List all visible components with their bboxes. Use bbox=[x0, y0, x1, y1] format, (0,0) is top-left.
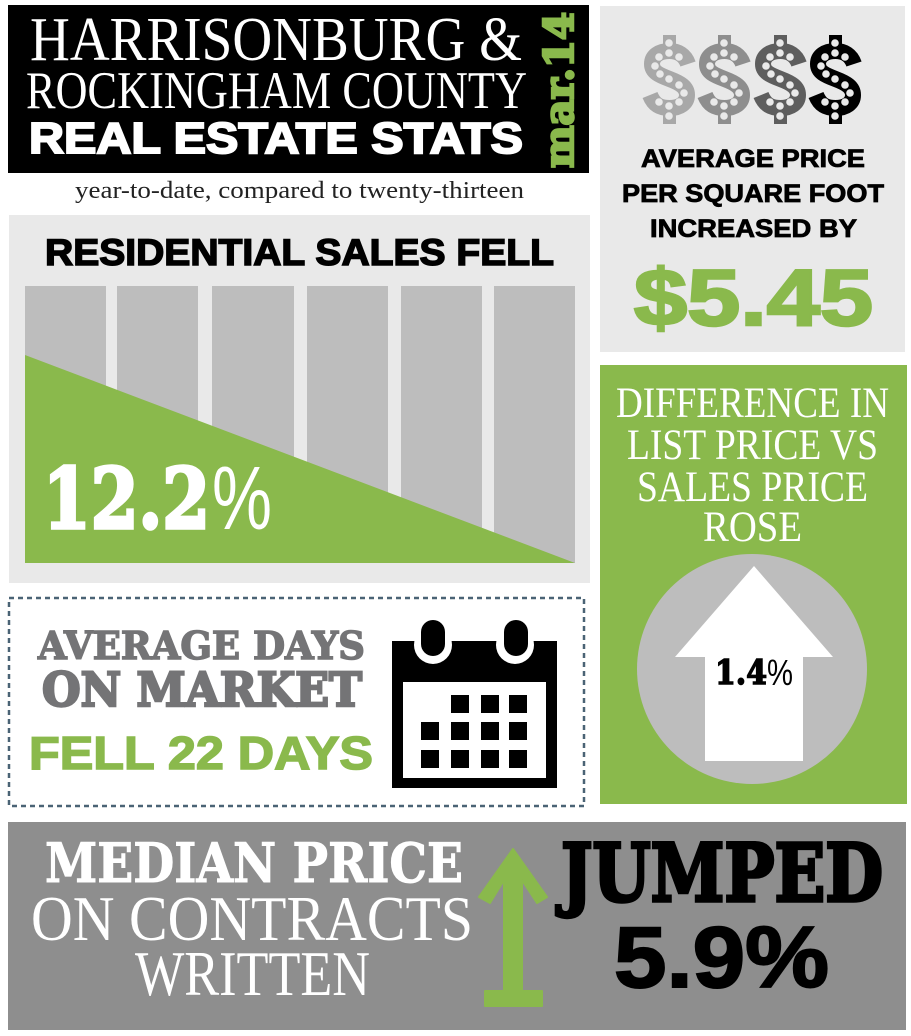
text: written: WRITTEN bbox=[135, 938, 370, 1009]
icon: four dollar signs bbox=[650, 35, 854, 124]
bar chart background columns bbox=[25, 286, 575, 563]
text: average price: AVERAGE PRICE bbox=[641, 145, 865, 173]
gray circle bbox=[637, 554, 867, 784]
text: sales price: SALES PRICE bbox=[637, 464, 868, 511]
icon: calendar bbox=[392, 620, 557, 788]
date label: mar.14 bbox=[536, 12, 583, 168]
heading: on market: ON MARKET bbox=[42, 663, 362, 718]
text: per square foot: PER SQUARE FOOT bbox=[622, 180, 884, 208]
title line 2: ROCKINGHAM COUNTY bbox=[26, 62, 527, 120]
title line 1: HARRISONBURG & bbox=[30, 6, 522, 74]
heading: residential sales fell: RESIDENTIAL SALES FELL bbox=[45, 232, 554, 273]
icon: up arrow bbox=[675, 566, 833, 761]
text: list price vs: LIST PRICE VS bbox=[627, 422, 878, 469]
panel: average days on market bbox=[9, 598, 584, 806]
declining green wedge bbox=[25, 355, 575, 563]
panel: list vs sales price bbox=[600, 365, 907, 804]
subtitle: year-to-date, compared to twenty-thirteen bbox=[75, 178, 524, 204]
stat: 1.4%: 1.4 bbox=[715, 653, 767, 693]
text: increased by: INCREASED BY bbox=[650, 215, 857, 243]
stat: fell 22 days: FELL 22 DAYS bbox=[29, 727, 373, 779]
stat: $5.45: $5.45 bbox=[634, 253, 873, 342]
panel: median price bbox=[8, 822, 906, 1030]
panel: price per square foot bbox=[600, 6, 905, 352]
stat: 12.2%: % bbox=[212, 449, 272, 549]
stat: 12.2%: 12.2 bbox=[43, 450, 210, 548]
title line 3: REAL ESTATE STATS bbox=[29, 114, 523, 163]
text: rose: ROSE bbox=[703, 504, 802, 551]
text: on contracts: ON CONTRACTS bbox=[31, 883, 473, 954]
icon: green up arrow bbox=[479, 849, 547, 1006]
text: median price: MEDIAN PRICE bbox=[45, 831, 463, 895]
stat: 1.4%: % bbox=[767, 652, 793, 693]
panel: residential sales bbox=[9, 215, 590, 583]
heading: average days: AVERAGE DAYS bbox=[37, 623, 365, 668]
header banner bbox=[8, 5, 589, 173]
stat: 5.9%: 5.9% bbox=[614, 910, 829, 1006]
